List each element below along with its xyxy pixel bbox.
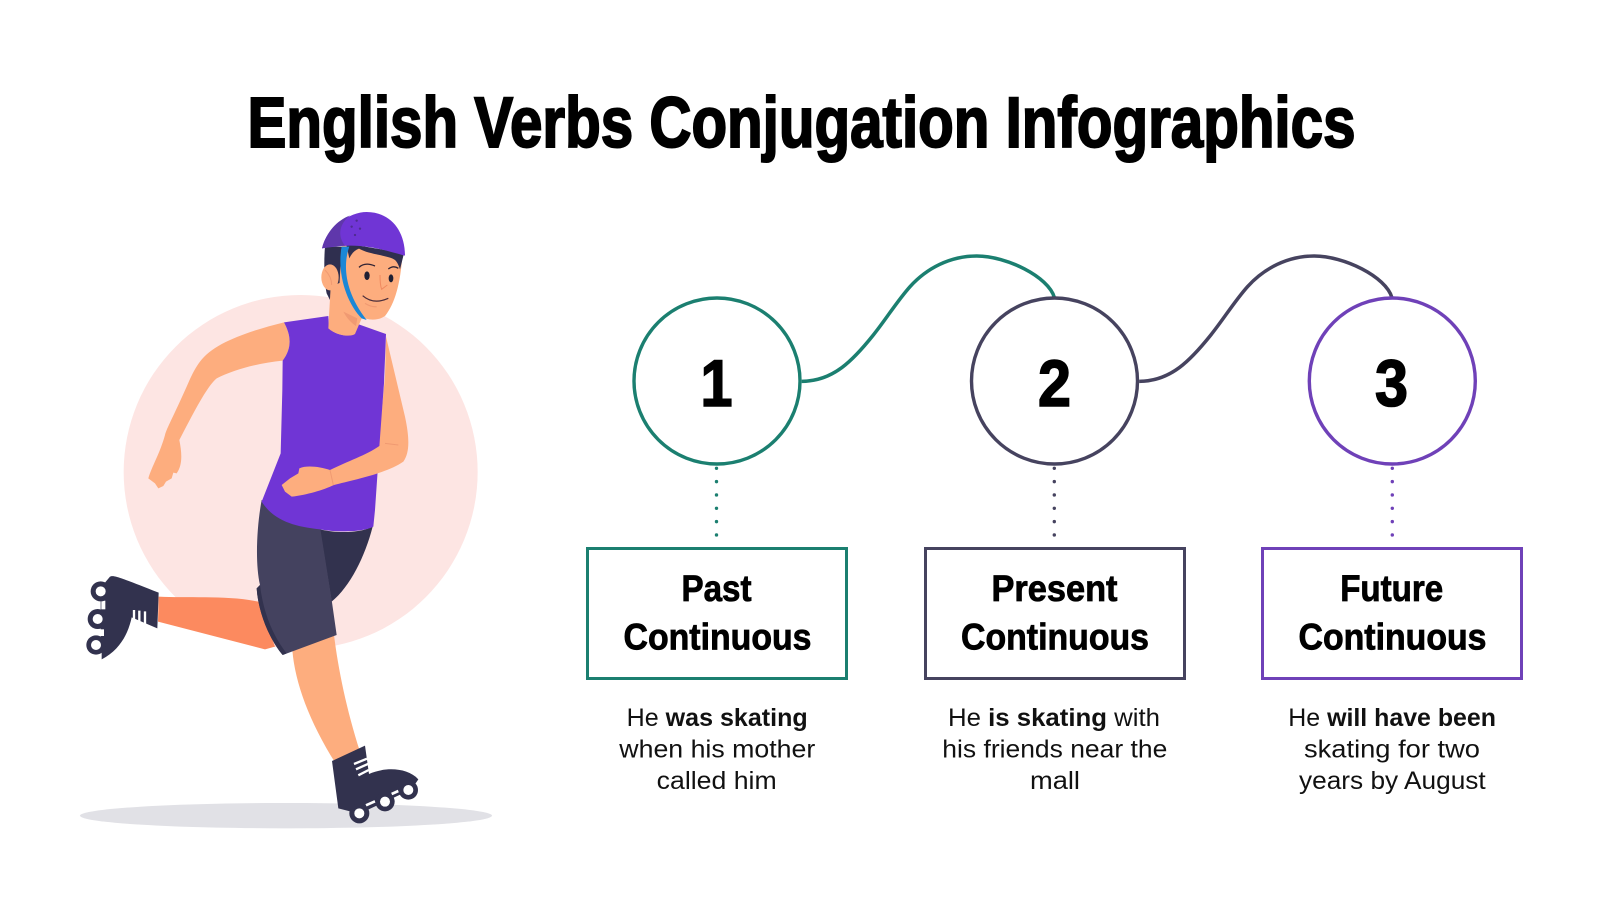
number circle 3 <box>1309 298 1475 464</box>
ground shadow <box>80 803 492 828</box>
shirt <box>262 316 386 531</box>
label box 2: Continuous <box>961 616 1149 658</box>
back skate <box>86 576 159 659</box>
label box 3: Future <box>1340 568 1443 609</box>
label box 1: Past <box>682 568 752 609</box>
connector: step 2 to step 3 <box>1139 256 1392 381</box>
front skate <box>332 746 418 823</box>
description 3: years by August <box>1299 767 1486 795</box>
description 3: skating for two <box>1304 736 1480 764</box>
front forearm and hand <box>282 438 407 497</box>
description 1: called him <box>657 767 777 795</box>
description 2 <box>942 704 1167 795</box>
pink background circle <box>124 295 478 649</box>
label box 3 <box>1262 548 1522 678</box>
step 1: past continuous <box>588 298 846 795</box>
label box 2: Present <box>992 568 1118 609</box>
illustration: roller skater <box>80 212 492 828</box>
label box 1: Continuous <box>624 616 812 658</box>
head <box>321 243 404 336</box>
description 2: his friends near the <box>942 736 1167 764</box>
step 3: future continuous <box>1262 298 1522 795</box>
description 3 <box>1288 704 1496 795</box>
shorts <box>257 500 373 655</box>
back arm <box>148 322 290 488</box>
number 1: 1 <box>700 346 732 420</box>
dotted line 3 <box>1391 468 1394 536</box>
dotted line 2 <box>1053 468 1056 536</box>
helmet <box>322 212 405 256</box>
front leg <box>292 635 360 765</box>
label box 1 <box>588 548 846 678</box>
description 1 <box>618 704 815 795</box>
dotted line 1 <box>715 468 718 536</box>
title: English Verbs Conjugation Infographics <box>248 84 1356 163</box>
number circle 2 <box>972 298 1138 464</box>
description 2: mall <box>1030 767 1080 795</box>
description 1: He was skating <box>627 704 808 732</box>
number 2: 2 <box>1038 346 1071 420</box>
back leg <box>158 597 275 649</box>
description 1: when his mother <box>618 736 815 764</box>
connector: step 1 to step 2 <box>802 256 1054 381</box>
number circle 1 <box>634 298 800 464</box>
number 3: 3 <box>1375 346 1408 420</box>
far arm behind shirt <box>373 337 408 462</box>
description 3: He will have been <box>1288 704 1496 732</box>
step 2: present continuous <box>926 298 1184 795</box>
label box 2 <box>926 548 1184 678</box>
description 2: He is skating with <box>948 704 1160 732</box>
label box 3: Continuous <box>1298 616 1486 658</box>
